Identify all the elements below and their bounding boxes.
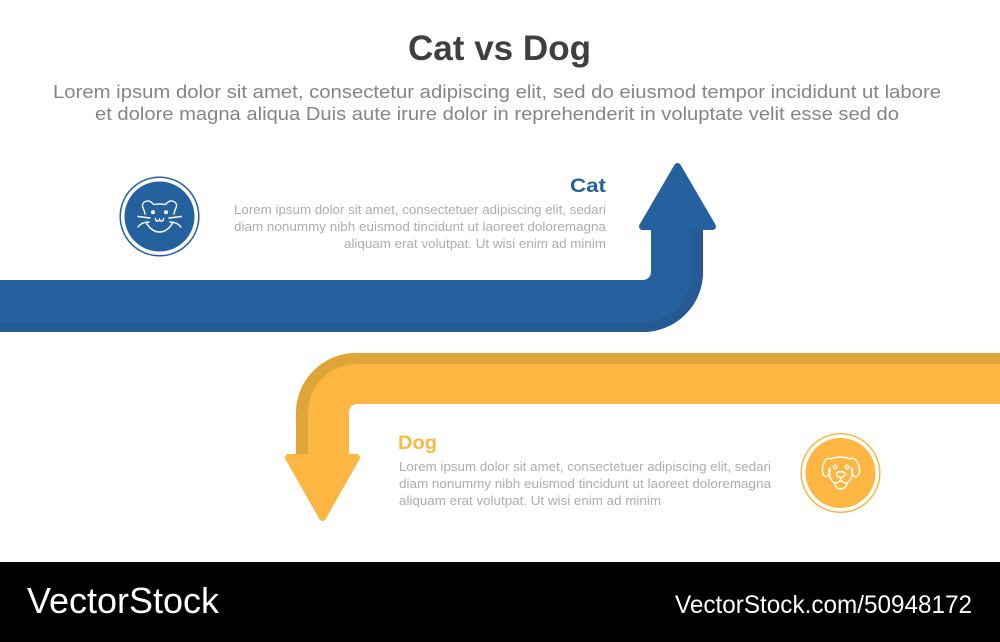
text block: dog	[399, 460, 771, 508]
footer bar	[0, 562, 1000, 642]
text block: dog: diam nonummy nibh euismod tincidunt ut laoreet doloremagna	[399, 477, 771, 491]
text block: cat	[234, 203, 606, 251]
text block: cat: Lorem ipsum dolor sit amet, consectetuer adipiscing elit, sedari	[234, 203, 606, 217]
description text: Lorem ipsum dolor sit amet, consectetur adipiscing elit, sed do eiusmod tempor incididunt ut labore	[53, 81, 941, 102]
icon: cat	[120, 177, 199, 256]
text block: dog: aliquam erat volutpat. Ut wisi enim ad minim	[399, 494, 661, 508]
icon: dog	[801, 434, 880, 512]
text block: cat: aliquam erat volutpat. Ut wisi enim ad minim	[344, 237, 606, 251]
label: dog: Dog	[398, 432, 437, 454]
footer url: VectorStock.com/50948172	[675, 591, 972, 619]
description text: et dolore magna aliqua Duis aute irure dolor in reprehenderit in voluptate velit esse sed do	[95, 103, 899, 124]
label: cat: Cat	[570, 175, 607, 197]
title: Cat vs Dog	[408, 29, 591, 68]
arrow: dog orange	[288, 353, 1000, 518]
text block: dog: Lorem ipsum dolor sit amet, consectetuer adipiscing elit, sedari	[399, 460, 771, 474]
arrow: cat blue	[0, 166, 712, 332]
text block: cat: diam nonummy nibh euismod tincidunt ut laoreet doloremagna	[234, 220, 606, 234]
description text	[53, 81, 941, 124]
footer logo: VectorStock	[27, 580, 220, 621]
